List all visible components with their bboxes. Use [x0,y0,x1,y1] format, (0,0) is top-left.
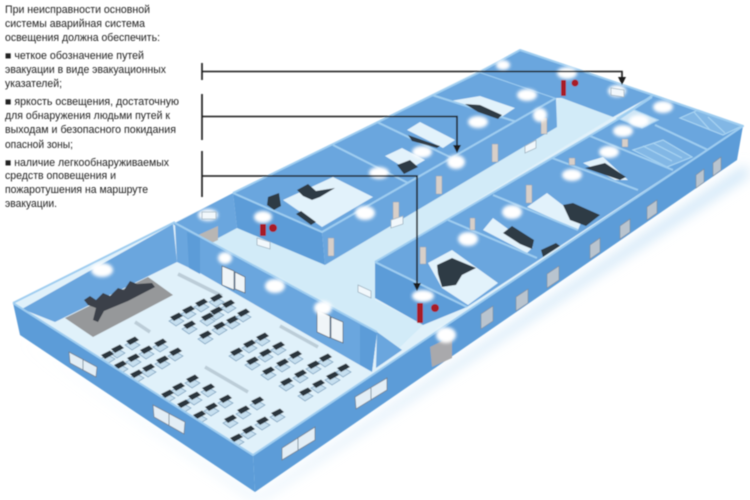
office furniture [267,104,502,225]
rooms walls base [375,95,743,307]
bullet 2 text: выходам и безопасного покидания [5,124,176,136]
office furniture [437,163,626,287]
bullet 3 text: ■ наличие легкообнаруживаемых [5,157,170,169]
building floor [13,50,743,455]
rooms walls base [233,72,556,232]
desks group B [100,336,183,383]
corridor doors [328,118,628,264]
intro text: системы аварийная система [5,18,145,30]
room floors [283,96,515,227]
callout lines [202,63,622,284]
wall: big hall back [22,224,177,322]
bullet 1 text: ■ четкое обозначение путей [5,50,144,62]
rooms front-left wall [375,262,467,325]
carpet [65,277,173,337]
bullet 3 text: средств оповещения и [5,170,116,182]
exit signs [202,88,624,298]
small cells [633,110,742,167]
meeting table [84,281,155,322]
desks group C [229,332,351,401]
floor light strips [135,274,318,392]
panel: upper rooms [233,72,557,265]
fire extinguishers [260,80,578,323]
carpet with meeting table [65,277,173,337]
rooms front wall [322,98,557,265]
outer front wall left [13,303,255,492]
desks group D [160,374,285,447]
outer front wall right [253,126,743,492]
ceiling lights [91,60,673,343]
bullet 2 text: для обнаружения людьми путей к [5,110,170,122]
intro text: При неисправности основной [5,4,150,16]
corridor floor [200,98,613,352]
arrowheads [413,77,626,291]
bullet 1 text: указателей; [5,78,62,90]
intro text: освещения должна обеспечить: [5,32,160,44]
bullet 2 text [5,96,179,151]
small windows right wall [481,157,721,329]
bullet 3 text: эвакуации. [5,198,57,210]
rooms end wall [233,193,325,265]
bullet 2 text: опасной зоны; [5,139,73,151]
exit door [430,336,452,367]
wall: hall corner [376,332,402,368]
wall: vestibule back [173,193,237,245]
bullet 2 text: ■ яркость освещения, достаточную [5,96,179,108]
desks group A [169,294,251,344]
bullet 1 text [5,50,167,90]
bullet 3 text: пожаротушения на маршруте [5,184,148,196]
vestibule door [196,226,218,246]
small room [617,109,658,128]
hall windows [69,352,387,460]
building shadow [20,165,750,500]
bullet 1 text: эвакуации в виде эвакуационных [5,64,167,76]
bullet 3 text [5,157,170,210]
room floors [428,157,628,305]
intro text [5,4,160,44]
wall: big hall side [175,223,377,372]
glazed doors [222,266,343,343]
pillars [187,232,377,371]
wall: rear corridor [480,50,653,117]
panel: lower rooms [375,95,743,325]
